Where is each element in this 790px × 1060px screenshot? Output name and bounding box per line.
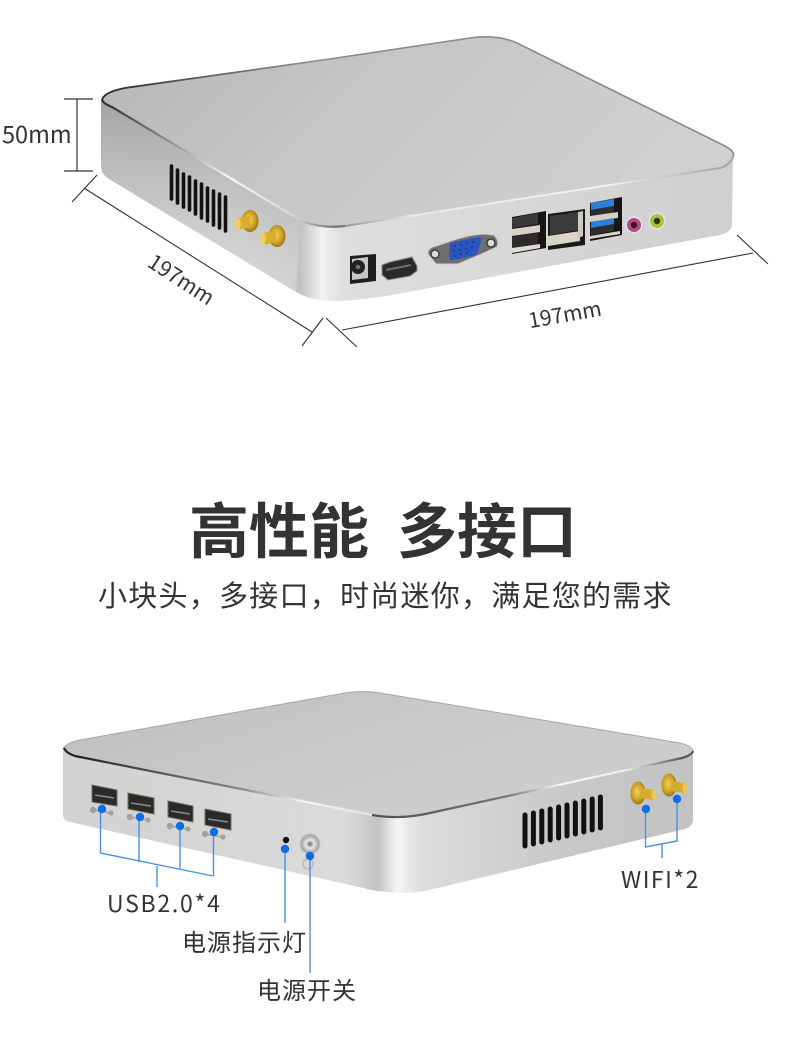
left side shading [101,100,300,292]
audio jacks [626,212,666,234]
wifi antenna connectors [630,774,688,804]
dimension: front width 197mm [326,235,768,347]
USB 3.0 double port [590,197,622,241]
vent slots [172,166,226,231]
callout: WIFI x2 [621,795,700,895]
power LED [283,837,289,843]
callout: power LED [182,845,307,958]
top surface edge highlights [64,692,693,817]
callout: power switch: 电源开关 [257,971,357,1006]
DC power jack [350,254,376,284]
dimension: front width 197mm: 197mm [526,293,604,335]
dimension: left depth 197mm: 197mm [142,246,221,312]
VGA port [428,234,498,264]
dimension: height 50mm: 50mm [2,116,72,150]
device body sides [101,90,733,301]
device top surface [63,692,693,817]
top surface edge highlights [102,37,734,227]
USB 2.0 ports [92,785,231,830]
callout: USB2.0 x4 [98,805,222,919]
subheading: 小块头，多接口，时尚迷你，满足您的需求 [98,573,673,615]
HDMI port [382,257,417,280]
power button [300,834,320,869]
callout: power LED: 电源指示灯 [182,923,307,958]
callout: USB2.0 x4: USB2.0*4 [107,885,222,919]
dimension: left depth 197mm [72,175,323,346]
main heading: 高性能 [189,484,369,571]
main heading: 多接口 [397,484,577,571]
USB symbols [91,808,225,839]
LAN port [548,209,585,250]
device: front view mini PC [63,692,693,893]
vent slots [525,797,600,846]
wifi antenna connectors [235,210,286,247]
device body sides [63,700,693,893]
device: top view mini PC [101,37,734,301]
callout: power switch [257,852,357,1006]
device top surface [101,37,734,227]
callout: WIFI x2: WIFI*2 [621,861,700,895]
USB double port [512,211,546,254]
dimension: height 50mm [2,99,93,171]
